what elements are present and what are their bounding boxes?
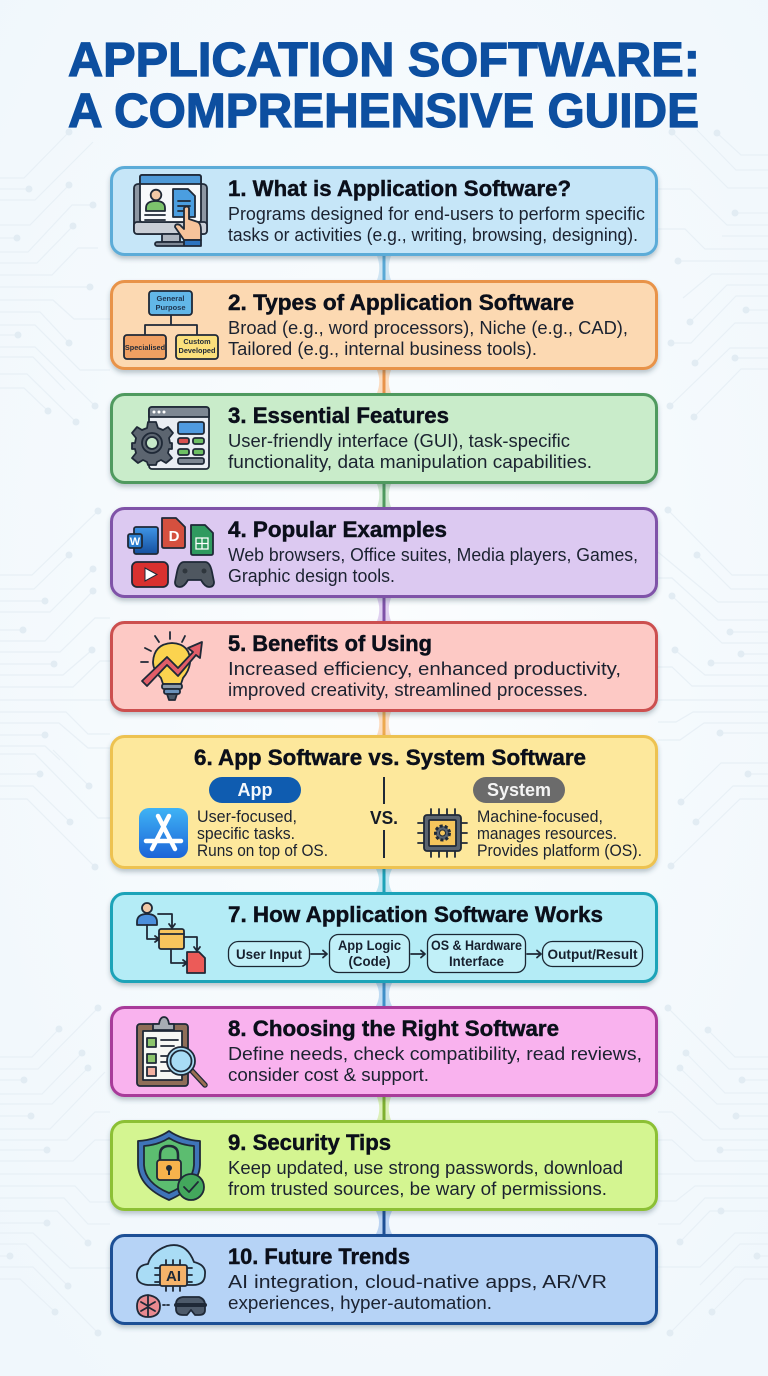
app description: specific tasks. [197,825,295,843]
panel: 4 Popular Examples [112,508,656,596]
step: OS and hardware interface: OS & Hardware [431,937,522,953]
heading: 1. What is Application Software? [228,176,571,201]
body text: Define needs, check compatibility, read reviews, [228,1044,642,1064]
body text: Increased efficiency, enhanced productivity, [228,659,621,679]
panel: 3 Essential Features [112,394,656,482]
icon: popular apps [128,518,214,587]
heading: 7. How Application Software Works [228,902,603,927]
title: A COMPREHENSIVE GUIDE [68,85,699,138]
body text: consider cost & support. [228,1065,429,1085]
heading: 9. Security Tips [228,1130,391,1155]
body text [228,431,592,472]
title [68,34,700,138]
heading: 5. Benefits of Using [228,631,432,656]
app description [197,808,328,860]
step: output: Output/Result [548,946,638,962]
panel: 10 Future Trends [112,1236,656,1324]
arrow [311,950,327,958]
title: APPLICATION SOFTWARE: [68,34,700,87]
body text [228,1158,623,1199]
heading: 2. Types of Application Software [228,290,574,315]
body text [228,204,645,245]
body text: Web browsers, Office suites, Media players, Games, [228,545,638,565]
icon: processor with gear [418,809,467,857]
body text: from trusted sources, be wary of permissions. [228,1179,607,1199]
system description [477,808,642,860]
panel: 5 Benefits of Using [112,622,656,710]
heading: 10. Future Trends [228,1244,410,1269]
body text: functionality, data manipulation capabilities. [228,452,592,472]
vs divider: VS. [370,808,398,828]
body text [228,318,628,359]
icon: workflow [137,903,205,973]
body text: AI integration, cloud-native apps, AR/VR [228,1272,607,1292]
vs divider [370,777,398,858]
badge: System: System [487,780,551,800]
body text: tasks or activities (e.g., writing, browsing, designing). [228,225,638,245]
badge: App [209,777,301,803]
panel: 1 What is Application Software [112,168,656,254]
body text [228,545,638,586]
arrow [411,950,425,958]
heading: 4. Popular Examples [228,517,447,542]
body text: Broad (e.g., word processors), Niche (e.g., CAD), [228,318,628,338]
icon: AI cloud, brain and VR headset: AI [166,1268,181,1285]
icon: software type hierarchy: Custom [183,337,211,346]
system description: Machine-focused, [477,808,603,826]
icon: popular apps: D [169,528,180,545]
heading: 3. Essential Features [228,403,449,428]
body text [228,1272,607,1313]
heading: 8. Choosing the Right Software [228,1016,559,1041]
body text: Programs designed for end-users to perform specific [228,204,645,224]
icon: software type hierarchy [124,291,218,359]
body text: User-friendly interface (GUI), task-specific [228,431,570,451]
system description: manages resources. [477,825,617,843]
icon: software type hierarchy: Specialised [125,343,165,352]
panel: 9 Security Tips [112,1122,656,1210]
step: user input [228,942,310,966]
app description: User-focused, [197,808,297,826]
step: user input: User Input [236,946,302,962]
body text: experiences, hyper-automation. [228,1293,492,1313]
badge: System [473,777,565,803]
panel: 8 Choosing the Right Software [112,1008,656,1096]
icon: shield with lock and check [138,1131,204,1200]
icon: software type hierarchy: Purpose [155,303,186,312]
icon: app store [139,808,188,858]
icon: light bulb with rising arrow [141,632,202,700]
panel: 6 App Software vs System Software [112,736,656,868]
panel: 7 How Application Software Works [112,894,656,982]
step: OS and hardware interface [428,934,526,972]
arrow [527,950,541,958]
body text: Graphic design tools. [228,566,395,586]
app description: Runs on top of OS. [197,842,328,860]
flow diagram [228,934,642,972]
step: app logic: App Logic [338,937,401,953]
panel: 2 Types of Application Software [112,282,656,368]
body text: Tailored (e.g., internal business tools). [228,339,537,359]
icon: gear and interface window [132,407,209,469]
icon: software type hierarchy: Developed [179,346,215,355]
step: app logic [330,934,410,972]
step: output [542,942,642,966]
badge: App: App [238,780,272,800]
heading: 6. App Software vs. System Software [194,745,586,770]
system description: Provides platform (OS). [477,842,642,860]
icon: software type hierarchy: General [157,294,184,303]
step: app logic: (Code) [348,953,390,969]
icon: popular apps: W [130,536,141,548]
icon: clipboard with magnifier [137,1017,205,1086]
body text: improved creativity, streamlined processes. [228,680,588,700]
body text: Keep updated, use strong passwords, download [228,1158,623,1178]
timeline connectors [376,256,392,1234]
body text [228,659,621,700]
step: OS and hardware interface: Interface [449,953,504,969]
body text [228,1044,642,1085]
icon: AI cloud, brain and VR headset [137,1245,207,1317]
icon: monitor with hand [134,175,207,246]
